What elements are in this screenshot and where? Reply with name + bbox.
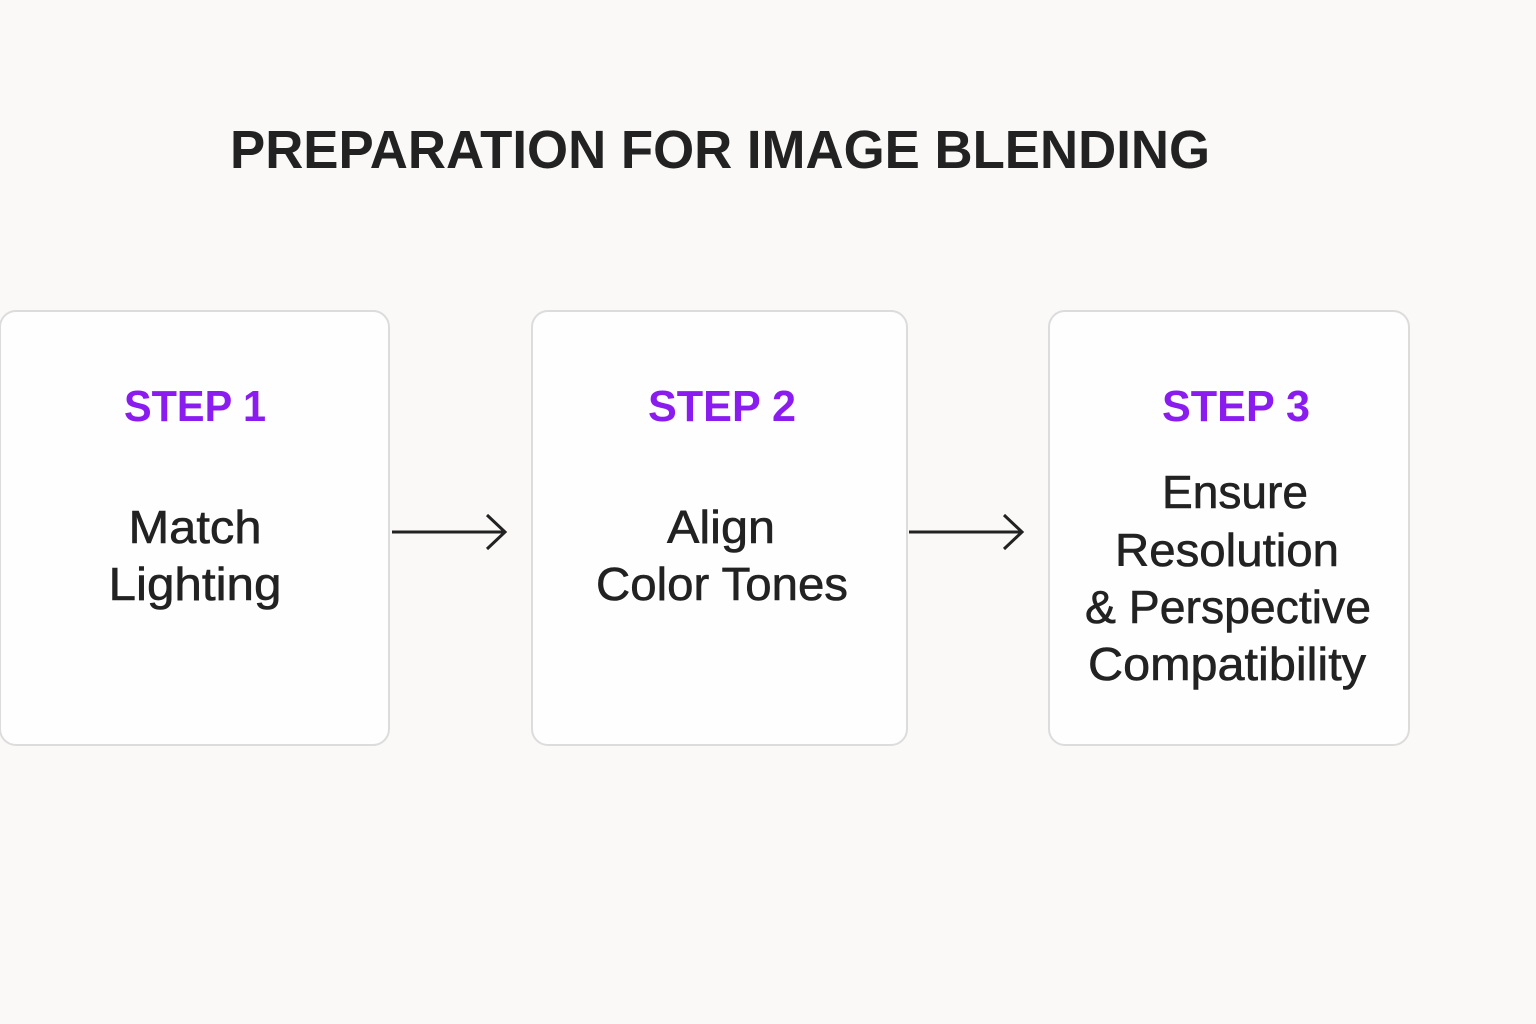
arrow 2 bbox=[909, 515, 1022, 549]
panel: step 2 bbox=[532, 311, 907, 745]
title: PREPARATION FOR IMAGE BLENDING bbox=[230, 120, 1210, 180]
panel: step 3: & Perspective bbox=[1085, 581, 1371, 633]
panel: step 3: STEP 3 bbox=[1162, 382, 1310, 431]
panel: step 1: Match bbox=[128, 501, 262, 553]
panel: step 1: Lighting bbox=[108, 558, 282, 610]
panel: step 2: STEP 2 bbox=[648, 382, 796, 431]
panel: step 3: Ensure bbox=[1162, 466, 1308, 518]
panel: step 3: Resolution bbox=[1115, 524, 1339, 576]
panel: step 3 bbox=[1049, 311, 1409, 745]
panel: step 2: Color Tones bbox=[596, 558, 848, 610]
panel: step 1: STEP 1 bbox=[124, 382, 266, 431]
panel: step 3: Compatibility bbox=[1088, 638, 1366, 690]
panel: step 2: Align bbox=[667, 501, 775, 553]
panel: step 1 bbox=[0, 311, 389, 745]
arrow 1 bbox=[392, 515, 505, 549]
